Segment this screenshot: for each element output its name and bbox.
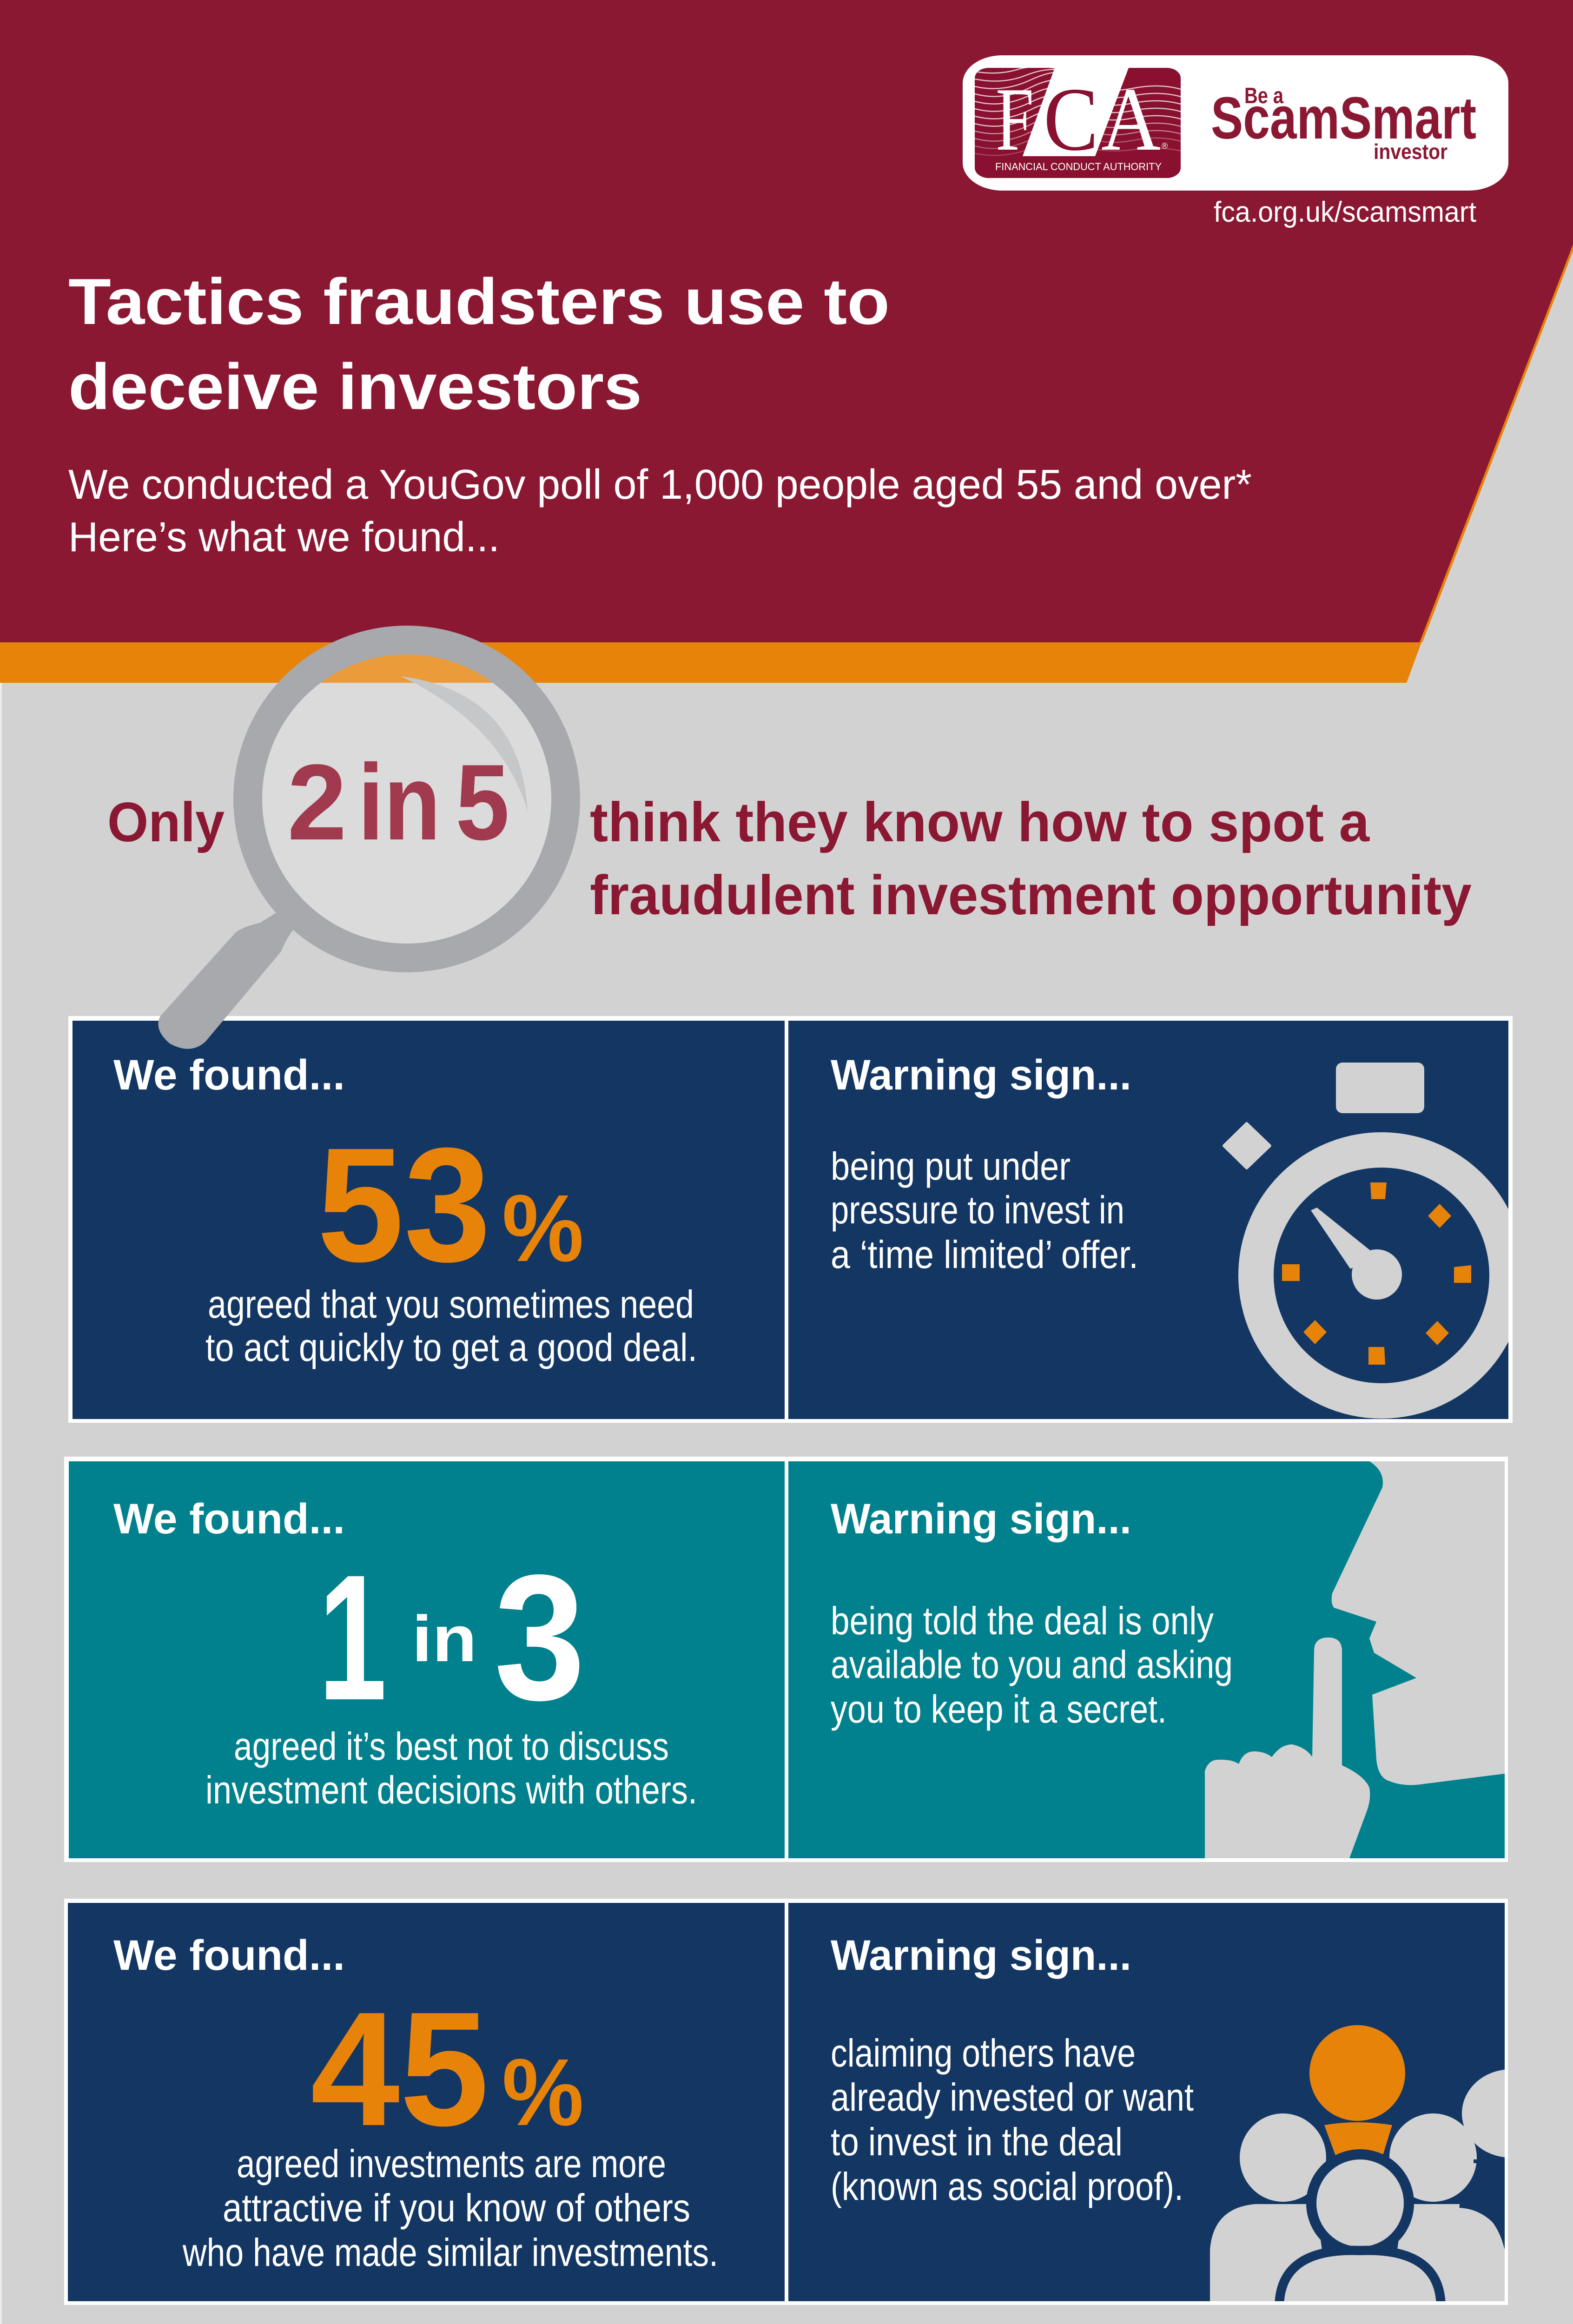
title	[68, 265, 890, 423]
we found: 1 in 3: in	[412, 1602, 477, 1675]
we found: 1 in 3	[113, 1495, 697, 1812]
we found: 45%: 45	[311, 1978, 489, 2160]
header banner	[0, 0, 1573, 683]
icon: face and finger to lips	[1205, 1461, 1505, 1858]
ScamSmart wordmark: ScamSmart	[1211, 85, 1476, 152]
warning sign text: pressure to invest in	[831, 1188, 1124, 1232]
headline statistic: fraudulent investment opportunity	[590, 864, 1472, 926]
ScamSmart wordmark: Be a	[1244, 84, 1283, 108]
warning sign text	[831, 1495, 1233, 1731]
we found: 53%: 53	[317, 1114, 491, 1296]
warning sign text: you to keep it a secret.	[831, 1687, 1167, 1731]
we found: 53%	[113, 1051, 697, 1369]
warning sign text: claiming others have	[831, 2031, 1136, 2075]
warning sign text: Warning sign...	[831, 1495, 1131, 1543]
ScamSmart wordmark: investor	[1374, 139, 1447, 164]
warning sign text: available to you and asking	[831, 1643, 1233, 1686]
intro text: Here’s what we found...	[68, 514, 500, 561]
we found: 45%: who have made similar investments.	[182, 2231, 718, 2274]
ScamSmart wordmark	[1211, 84, 1476, 164]
headline statistic	[107, 742, 1472, 926]
warning sign text: already invested or want	[831, 2075, 1194, 2119]
intro text	[68, 462, 1252, 561]
warning sign text: (known as social proof).	[831, 2165, 1183, 2208]
intro text: We conducted a YouGov poll of 1,000 people aged 55 and over*	[68, 462, 1252, 508]
warning sign text	[831, 1932, 1194, 2208]
website address: fca.org.uk/scamsmart	[1214, 196, 1476, 228]
FCA logo: F	[996, 69, 1034, 170]
warning sign text: to invest in the deal	[831, 2120, 1123, 2164]
icon: stopwatch	[1224, 1063, 1507, 1401]
we found: 45%: agreed investments are more	[237, 2142, 666, 2185]
we found: 53%: We found...	[113, 1051, 345, 1099]
headline statistic: 2	[287, 742, 347, 863]
icon: magnifying glass	[158, 640, 566, 1049]
warning sign text: being put under	[831, 1144, 1071, 1188]
headline statistic: in	[358, 742, 441, 863]
headline statistic: 5	[456, 742, 509, 863]
we found: 1 in 3: We found...	[113, 1495, 345, 1543]
icon: group of people	[1210, 2025, 1505, 2301]
warning sign text: a ‘time limited’ offer.	[831, 1233, 1138, 1276]
FCA logo: C	[1044, 69, 1098, 170]
FCA logo: A	[1101, 69, 1161, 170]
we found: 1 in 3: 1	[318, 1537, 387, 1737]
warning sign text: Warning sign...	[831, 1932, 1131, 1979]
FCA logo: ®	[1162, 141, 1168, 151]
we found: 45%	[113, 1932, 718, 2274]
title: Tactics fraudsters use to	[68, 265, 890, 338]
we found: 53%: agreed that you sometimes need	[208, 1282, 694, 1326]
we found: 1 in 3: 3	[494, 1537, 585, 1737]
panel: time pressure	[68, 1016, 1513, 1423]
FCA logo	[975, 66, 1184, 178]
headline statistic: think they know how to spot a	[590, 791, 1370, 853]
we found: 1 in 3: agreed it’s best not to discuss	[234, 1724, 669, 1768]
logo panel	[963, 55, 1508, 191]
headline statistic: Only	[107, 791, 225, 853]
we found: 45%: We found...	[113, 1932, 345, 1979]
we found: 53%: %	[502, 1175, 584, 1281]
we found: 45%: attractive if you know of others	[223, 2186, 690, 2230]
FCA logo: FINANCIAL CONDUCT AUTHORITY	[995, 161, 1162, 172]
we found: 45%: %	[502, 2039, 584, 2146]
warning sign text: Warning sign...	[831, 1051, 1131, 1099]
warning sign text: being told the deal is only	[831, 1599, 1214, 1643]
we found: 1 in 3: investment decisions with others.	[205, 1768, 697, 1812]
warning sign text	[831, 1051, 1138, 1276]
panel: social proof	[64, 1899, 1560, 2308]
panel: secrecy	[64, 1457, 1508, 1862]
title: deceive investors	[68, 350, 642, 423]
we found: 53%: to act quickly to get a good deal.	[205, 1326, 697, 1369]
